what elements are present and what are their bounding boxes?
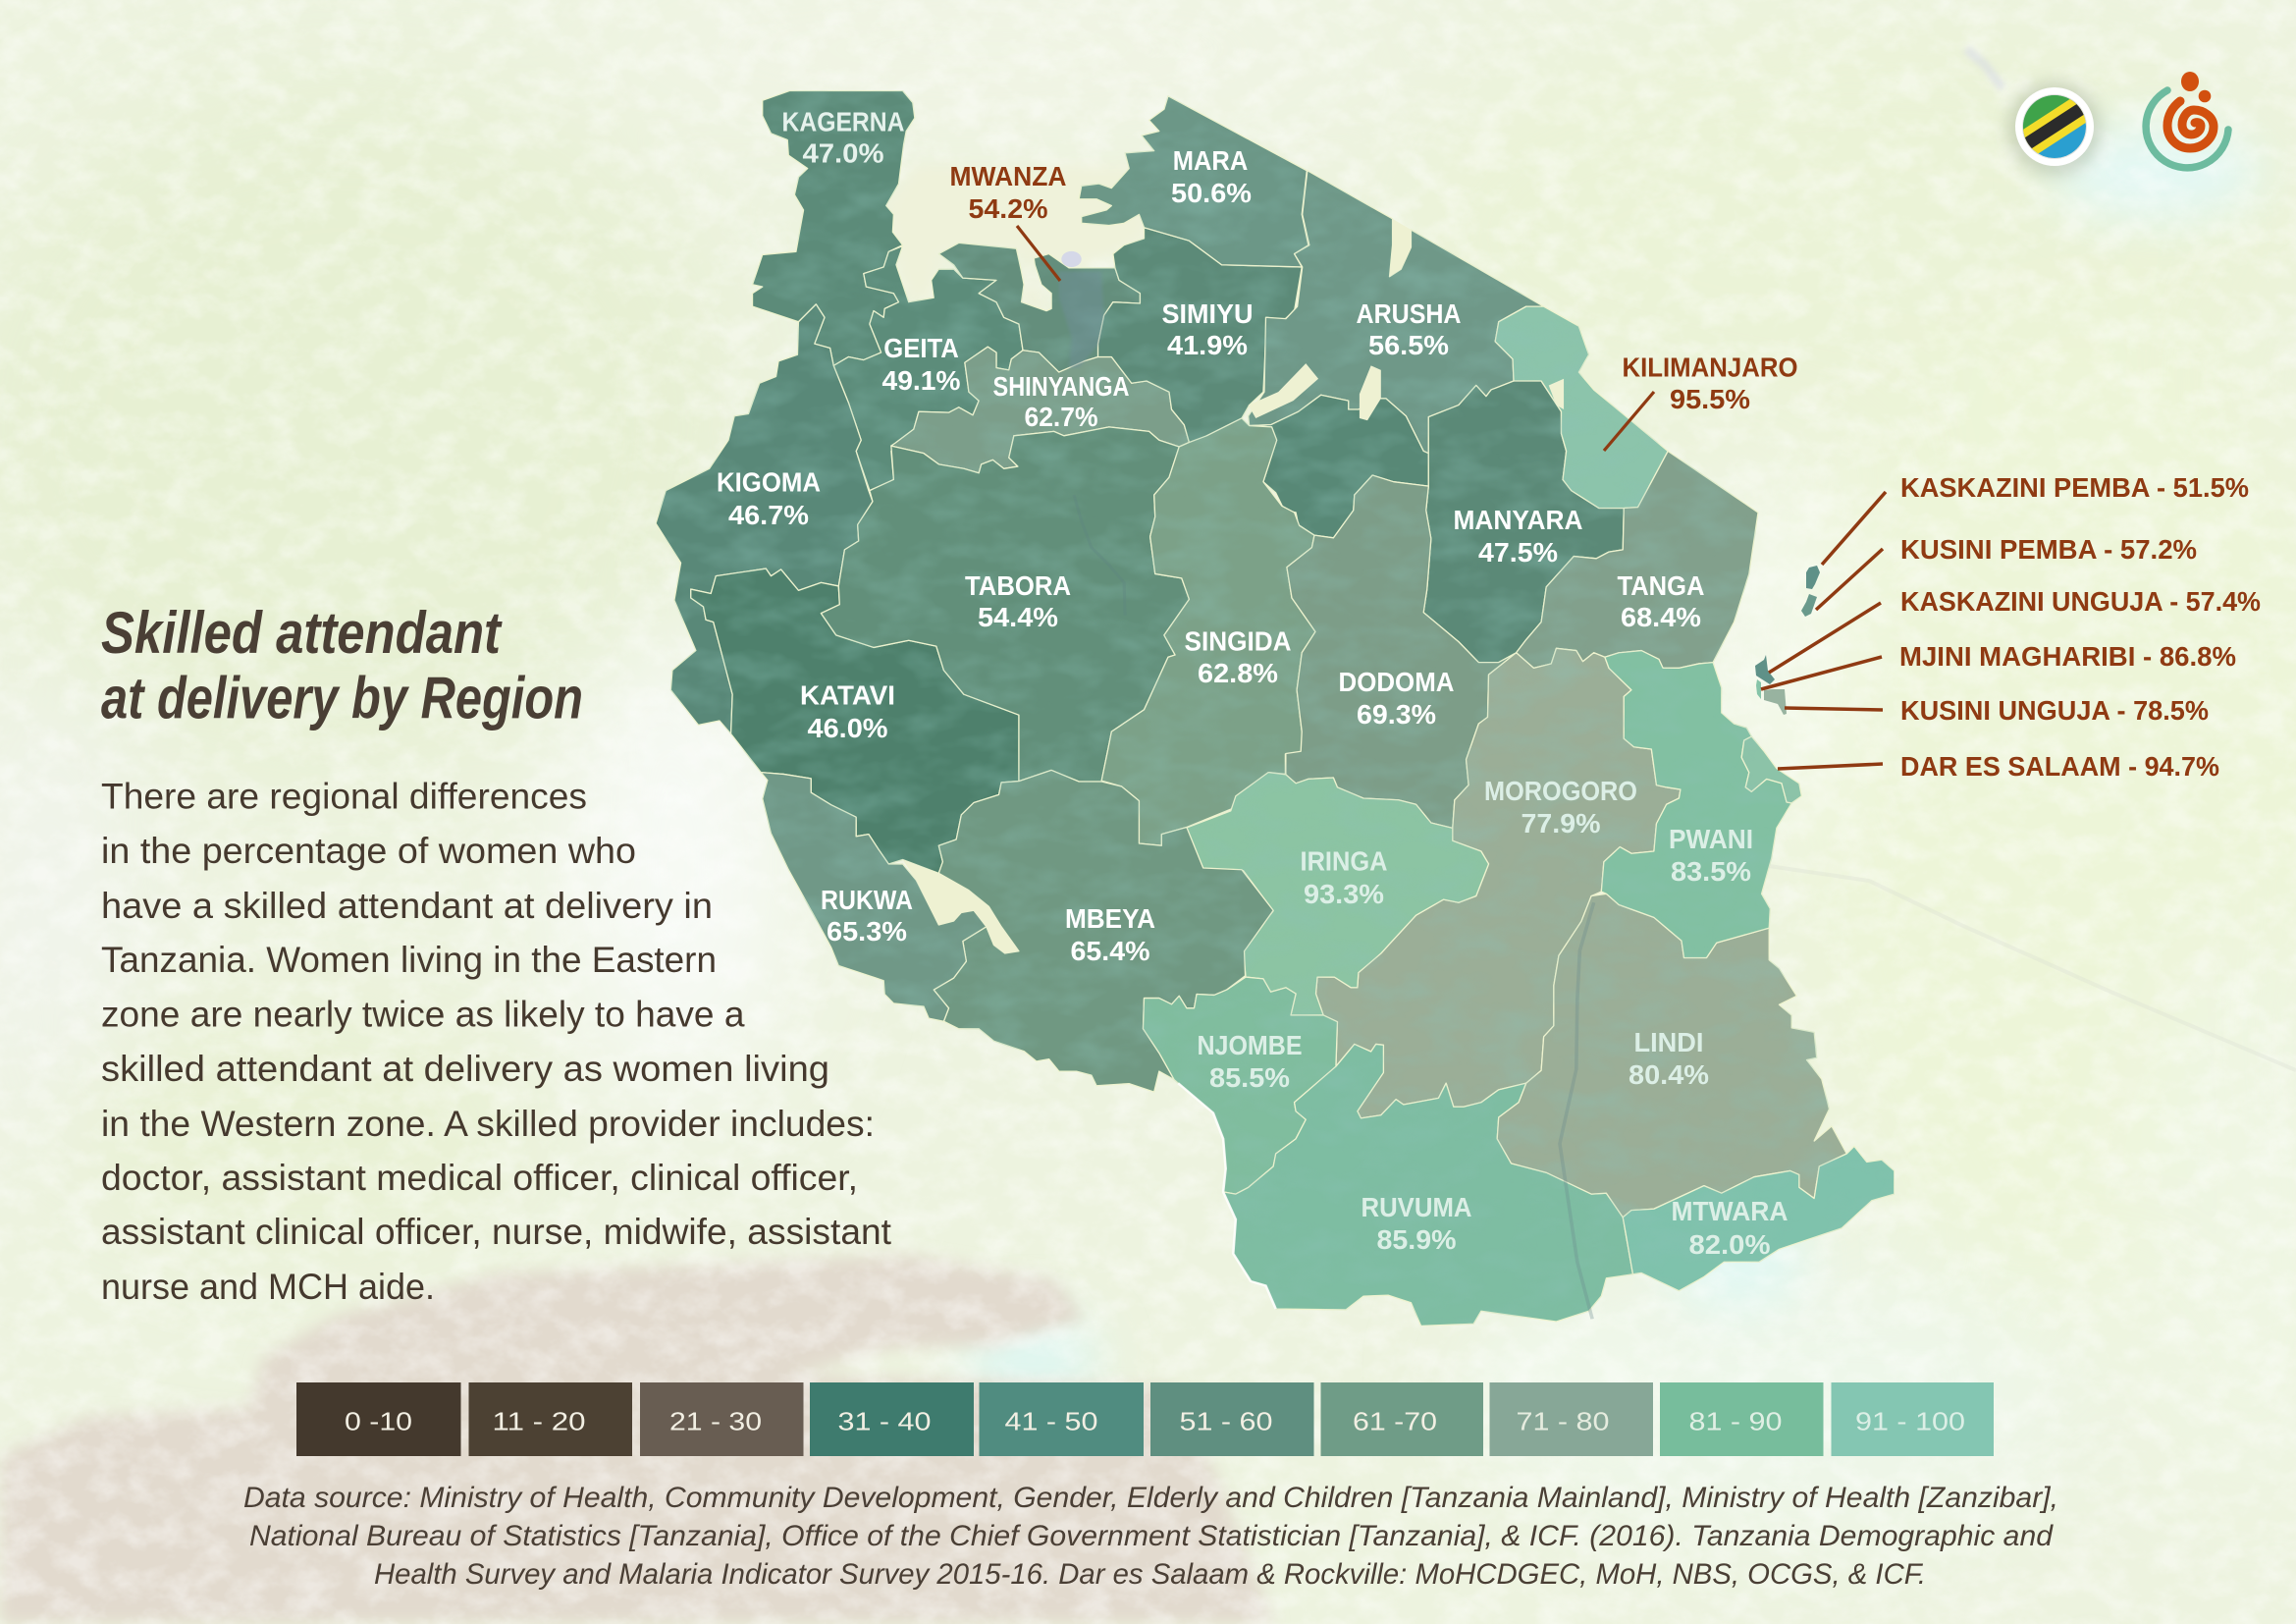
label: Mtwara xyxy=(1671,1196,1789,1260)
legend swatch 41-50: 41 - 50 xyxy=(1005,1406,1097,1435)
region: Kilimanjaro xyxy=(1495,306,1668,508)
legend swatch 41-50 xyxy=(980,1382,1144,1456)
label: Kigoma xyxy=(717,467,821,530)
callout: Mwanza: MWANZA xyxy=(950,161,1067,191)
island: Kaskazini Unguja xyxy=(1755,655,1775,684)
callout: Kilimanjaro: KILIMANJARO xyxy=(1622,352,1798,383)
label: Tanga: TANGA xyxy=(1618,570,1705,601)
callout: Kilimanjaro xyxy=(1604,352,1798,451)
label: Kagera: 47.0% xyxy=(803,137,883,169)
island: Kusini Unguja xyxy=(1764,689,1787,715)
region: Lindi xyxy=(1497,893,1846,1218)
region: Geita xyxy=(833,246,1023,491)
body text: in the Western zone. A skilled provider includes: xyxy=(101,1104,875,1144)
data source footer: Data source: Ministry of Health, Community Development, Gender, Elderly and Children [Tanzania Mainland], Ministry of Health [Zanzibar], xyxy=(243,1482,2058,1514)
label: Arusha xyxy=(1357,298,1462,360)
label: Njombe: NJOMBE xyxy=(1198,1030,1302,1060)
body text: skilled attendant at delivery as women living xyxy=(101,1049,829,1089)
label: Iringa xyxy=(1300,846,1388,909)
callout: Kaskazini Pemba xyxy=(1822,472,2249,565)
region: Dar es Salaam xyxy=(1741,736,1801,803)
label: Iringa: IRINGA xyxy=(1300,846,1388,876)
label: Mbeya xyxy=(1065,903,1155,966)
label: Tanga: 68.4% xyxy=(1621,602,1701,632)
region: Pwani xyxy=(1601,651,1791,957)
legend swatch 21-30 xyxy=(640,1382,803,1456)
label: Simiyu: SIMIYU xyxy=(1162,298,1253,329)
region: Rukwa xyxy=(761,773,987,1021)
label: Tabora: 54.4% xyxy=(978,602,1058,632)
label: Dodoma: 69.3% xyxy=(1357,699,1436,730)
label: Katavi: 46.0% xyxy=(807,713,887,743)
Zanzibar and Pemba islands xyxy=(1755,566,1820,715)
body text: in the percentage of women who xyxy=(101,831,636,871)
label: Geita: 49.1% xyxy=(881,365,960,396)
label: Rukwa: 65.3% xyxy=(827,916,907,947)
region: Dodoma xyxy=(1286,475,1517,828)
body text: nurse and MCH aide. xyxy=(101,1267,435,1307)
region: Tanga xyxy=(1517,451,1758,668)
body text: zone are nearly twice as likely to have a xyxy=(101,994,745,1035)
label: Iringa: 93.3% xyxy=(1304,879,1384,909)
legend swatch 11-20 xyxy=(469,1382,632,1456)
region: Kagera xyxy=(753,90,915,365)
region: Shinyanga xyxy=(891,347,1189,473)
legend swatch 51-60: 51 - 60 xyxy=(1180,1406,1272,1435)
legend swatch 21-30: 21 - 30 xyxy=(669,1406,762,1435)
label: Ruvuma: 85.9% xyxy=(1376,1224,1457,1255)
body text: Tanzania. Women living in the Eastern xyxy=(101,940,717,980)
region: Tabora xyxy=(821,427,1189,782)
label: Morogoro xyxy=(1484,776,1637,839)
region: Mtwara xyxy=(1623,1146,1895,1291)
legend swatch 81-90 xyxy=(1660,1382,1824,1456)
white region labels xyxy=(717,106,1789,1260)
label: Dodoma xyxy=(1339,667,1455,730)
label: Kigoma: 46.7% xyxy=(728,500,809,530)
label: Singida xyxy=(1184,626,1292,688)
body text: assistant clinical officer, nurse, midwife, assistant xyxy=(101,1212,892,1252)
label: Rukwa xyxy=(821,885,913,947)
legend swatch 71-80: 71 - 80 xyxy=(1516,1406,1610,1435)
label: Simiyu xyxy=(1162,298,1253,360)
label: Kagera xyxy=(781,106,905,169)
region: Mbeya xyxy=(934,770,1273,1092)
label: Njombe: 85.5% xyxy=(1209,1062,1290,1093)
label: Singida: SINGIDA xyxy=(1184,626,1292,656)
lakes and rivers on the map xyxy=(903,219,1594,1319)
label: Katavi: KATAVI xyxy=(800,679,895,711)
data source footer: Health Survey and Malaria Indicator Survey 2015-16. Dar es Salaam & Rockville: MoHCDGEC, MoH, NBS, OCGS, & ICF. xyxy=(374,1558,1926,1591)
label: Manyara xyxy=(1453,505,1583,568)
label: Lindi: 80.4% xyxy=(1629,1059,1709,1090)
callout: Mjini Magharibi xyxy=(1761,641,2236,689)
label: Katavi xyxy=(800,679,895,743)
callout: Mjini Magharibi: MJINI MAGHARIBI - 86.8% xyxy=(1899,641,2236,672)
label: Mtwara: MTWARA xyxy=(1671,1196,1789,1226)
legend swatch 61-70: 61 -70 xyxy=(1353,1406,1437,1435)
label: Simiyu: 41.9% xyxy=(1167,330,1248,360)
label: Kagera: KAGERNA xyxy=(781,106,905,137)
region: Katavi xyxy=(691,568,1019,873)
label: Shinyanga: SHINYANGA xyxy=(993,371,1130,402)
callout: Kaskazini Pemba: KASKAZINI PEMBA - 51.5% xyxy=(1900,472,2249,503)
legend swatch 31-40 xyxy=(810,1382,974,1456)
label: Kigoma: KIGOMA xyxy=(717,467,821,497)
callout: Kaskazini Unguja: KASKAZINI UNGUJA - 57.4% xyxy=(1900,586,2261,617)
region: Morogoro xyxy=(1316,648,1681,1118)
label: Mara: 50.6% xyxy=(1171,178,1252,208)
legend swatch 51-60 xyxy=(1150,1382,1313,1456)
callout: Kilimanjaro: 95.5% xyxy=(1670,384,1750,414)
label: Ruvuma xyxy=(1361,1192,1472,1255)
label: Njombe xyxy=(1198,1030,1302,1093)
body text: There are regional differences xyxy=(101,776,587,817)
body text: have a skilled attendant at delivery in xyxy=(101,886,713,926)
region: Mwanza xyxy=(938,243,1140,372)
label: Morogoro: MOROGORO xyxy=(1484,776,1637,806)
legend swatch 61-70 xyxy=(1321,1382,1483,1456)
island: Mjini Magharibi xyxy=(1756,679,1761,699)
legend swatch 71-80 xyxy=(1490,1382,1653,1456)
label: Singida: 62.8% xyxy=(1198,658,1278,688)
label: Dodoma: DODOMA xyxy=(1339,667,1455,697)
label: Tabora xyxy=(965,570,1071,632)
legend swatch 11-20: 11 - 20 xyxy=(493,1406,585,1435)
label: Mara xyxy=(1171,145,1252,208)
callout: Kusini Pemba xyxy=(1816,534,2197,610)
title: Skilled attendant xyxy=(101,600,504,666)
region: Arusha xyxy=(1249,171,1544,454)
callout: Mwanza: 54.2% xyxy=(968,193,1048,224)
legend swatch 91-100 xyxy=(1832,1382,1994,1456)
legend swatch 31-40: 31 - 40 xyxy=(838,1406,931,1435)
map of Tanzania xyxy=(656,90,1895,1326)
region: Manyara xyxy=(1423,377,1624,663)
body text xyxy=(101,776,892,1307)
icon: organisation logo xyxy=(2146,72,2228,168)
label: Shinyanga xyxy=(993,371,1130,432)
label: Tanga xyxy=(1618,570,1705,632)
label: Geita: GEITA xyxy=(883,333,959,363)
callout: Kaskazini Unguja xyxy=(1769,586,2261,673)
callouts: islands and Dar es Salaam xyxy=(1761,472,2261,782)
label: Arusha: ARUSHA xyxy=(1357,298,1462,329)
legend xyxy=(296,1382,1994,1456)
title: at delivery by Region xyxy=(101,666,583,731)
label: Manyara: 47.5% xyxy=(1478,537,1558,568)
region: Simiyu xyxy=(1098,228,1302,443)
label: Morogoro: 77.9% xyxy=(1522,808,1600,839)
region: Singida xyxy=(1101,418,1315,845)
legend swatch 0-10 xyxy=(296,1382,461,1456)
region: Njombe xyxy=(1143,977,1337,1194)
legend swatch 0-10: 0 -10 xyxy=(345,1406,412,1435)
legend swatch 81-90: 81 - 90 xyxy=(1688,1406,1783,1435)
island: Kusini Pemba xyxy=(1801,594,1817,617)
label: Pwani xyxy=(1669,824,1753,887)
region: Ruvuma xyxy=(1223,1044,1632,1326)
legend swatch 91-100: 91 - 100 xyxy=(1855,1406,1965,1435)
data source footer: National Bureau of Statistics [Tanzania], Office of the Chief Government Statistician [Tanzania], & ICF. (2016). Tanzania Demographic and xyxy=(249,1520,2054,1552)
title xyxy=(101,600,583,731)
body text: doctor, assistant medical officer, clinical officer, xyxy=(101,1158,858,1198)
label: Pwani: 83.5% xyxy=(1671,856,1751,887)
label: Pwani: PWANI xyxy=(1669,824,1753,854)
icon: Tanzania flag badge xyxy=(1999,72,2102,176)
label: Mara: MARA xyxy=(1173,145,1248,176)
label: Tabora: TABORA xyxy=(965,570,1071,601)
label: Lindi: LINDI xyxy=(1633,1027,1704,1057)
callout: Kusini Unguja: KUSINI UNGUJA - 78.5% xyxy=(1900,695,2209,726)
label: Ruvuma: RUVUMA xyxy=(1361,1192,1472,1222)
label: Mbeya: 65.4% xyxy=(1070,936,1150,966)
label: Geita xyxy=(881,333,960,396)
label: Shinyanga: 62.7% xyxy=(1025,402,1097,432)
label: Mtwara: 82.0% xyxy=(1688,1229,1771,1260)
island: Kaskazini Pemba xyxy=(1806,566,1820,589)
region: Kigoma xyxy=(656,304,873,733)
label: Lindi xyxy=(1629,1027,1709,1090)
label: Arusha: 56.5% xyxy=(1368,330,1449,360)
data source footer xyxy=(243,1482,2058,1591)
label: Rukwa: RUKWA xyxy=(821,885,913,915)
callout: Kusini Pemba: KUSINI PEMBA - 57.2% xyxy=(1900,534,2197,565)
mainland regions xyxy=(656,90,1895,1326)
region: unlabelled north-central xyxy=(1250,395,1428,538)
label: Manyara: MANYARA xyxy=(1453,505,1583,535)
callout: Dar es Salaam: DAR ES SALAAM - 94.7% xyxy=(1900,751,2219,782)
region: Mara xyxy=(1079,96,1308,267)
region: Iringa xyxy=(1186,773,1489,1015)
callout: Mwanza xyxy=(950,161,1067,281)
label: Mbeya: MBEYA xyxy=(1065,903,1155,934)
